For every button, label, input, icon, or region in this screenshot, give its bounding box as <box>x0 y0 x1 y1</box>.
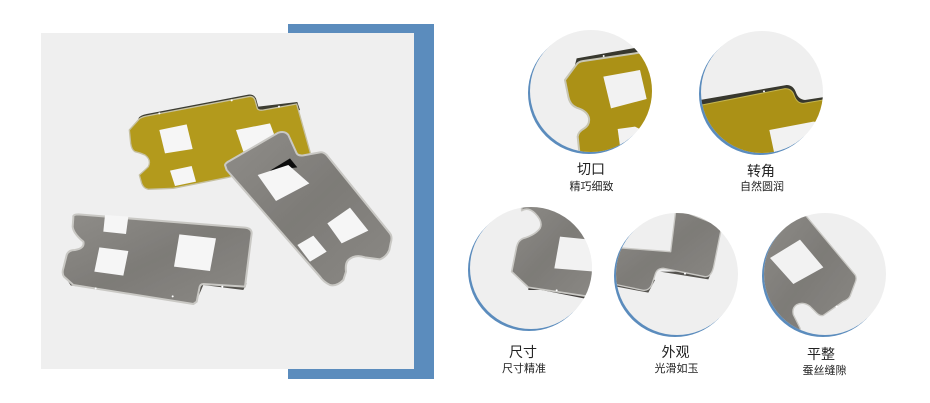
sublabel: flatness: 蚕丝缝隙 <box>802 363 846 377</box>
label: appearance: 外观 <box>662 344 690 360</box>
label: notch: 切口 <box>577 161 605 177</box>
detail: size <box>468 207 592 374</box>
label: flatness: 平整 <box>807 346 835 362</box>
close-up: grey plate corner <box>764 216 857 330</box>
product photo: three shield plates <box>63 94 392 304</box>
label: corner: 转角 <box>747 163 775 179</box>
sublabel: appearance: 光滑如玉 <box>654 361 698 375</box>
detail: notch <box>528 30 658 193</box>
sublabel: corner: 自然圆润 <box>740 179 784 193</box>
close-up: grey notch edge <box>510 207 592 298</box>
plate: yellow back <box>129 94 311 189</box>
label: size: 尺寸 <box>509 344 537 360</box>
circle with blue crescent <box>699 31 823 155</box>
sublabel: size: 尺寸精准 <box>502 361 546 375</box>
detail: appearance <box>613 208 738 375</box>
grey photo panel <box>41 33 414 369</box>
close-up: yellow corner <box>564 48 652 152</box>
close-up: grey stepped edge <box>613 208 722 293</box>
circle with blue crescent <box>614 213 738 337</box>
close-up: yellow edge <box>700 85 827 157</box>
detail: corner <box>699 31 827 193</box>
circle with blue crescent <box>762 213 886 337</box>
sublabel: notch: 精巧细致 <box>570 179 614 193</box>
plate: grey front left <box>63 214 252 304</box>
plate: grey front right <box>225 132 392 285</box>
circle with blue crescent <box>528 30 652 154</box>
circle with blue crescent <box>468 207 592 331</box>
blue frame <box>288 24 434 379</box>
detail: flatness <box>760 208 886 377</box>
